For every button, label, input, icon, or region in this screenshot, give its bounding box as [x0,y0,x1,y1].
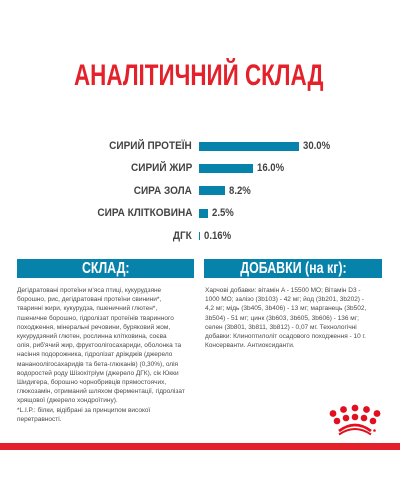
text: склад: Дегідратовані протеїни м'яса птиці, кукурудзяне [17,287,161,294]
text: добавки: Харчові добавки: вітамін A - 15500 МО; Вітамін D3 - [205,287,361,294]
text: склад: *L.I.P.: білки, відібрані за принципом високої [17,407,150,414]
row: сира зола [134,185,251,197]
heading: склад: СКЛАД: [82,260,129,277]
text: склад: борошно, рис, дегідратовані протеїни свинини*, [17,296,161,303]
text: склад: мананоолігосахаридів та бета-глюканів) (0,30%), олія [17,361,178,368]
text: склад: олія, риб'ячий жир, фруктоолігосахариди, оболонка та [17,342,181,349]
heading: добавки: ДОБАВКИ (на кг): [240,260,346,277]
text: добавки: селен (3b801, 3b811, 3b812) - 0,07 мг. Технологічні [205,324,357,331]
bar chart [97,139,330,242]
icon: royal canin crown logo [330,404,380,436]
row: дгк: 0.16% [204,230,231,242]
bottom red stripe [0,443,400,450]
row: сирий жир: СИРИЙ ЖИР [131,162,192,174]
text: склад: насіння подорожника, гідролізат дріжджів (джерело [17,351,172,358]
heading: склад [17,259,194,278]
row: сира клітковина: СИРА КЛІТКОВИНА [97,207,192,219]
row: сира зола: 8.2% [229,185,251,197]
text: склад: кукурудзяний глютен, рослинна клітковина, соєва [17,333,167,340]
text: добавки: добавки: Клиноптилоліт осадового походження - 10 г. [205,333,366,340]
text: склад: Шидигера, борошно чорнобривців прямостоячих, [17,379,166,386]
text: склад: походження, мінеральні речовини, буряковий жом, [17,324,170,331]
text: склад: перетравності. [17,416,62,423]
text: склад: пшеничне борошно, гідролізат протеїнів тваринного [17,315,174,322]
row: дгк [172,230,231,242]
text: добавки [205,287,366,349]
text: склад: глюкозамін, отриманий шляхом ферментації, гідролізат [17,388,185,395]
text: добавки: 4,2 мг; мідь (3b405, 3b406) - 13 мг; марганець (3b502, [205,305,366,312]
row: сирий протеїн: 30.0% [303,140,330,152]
text: склад: тваринні жири, кукурудза, пшеничний глютен*, [17,305,157,312]
row: сирий жир [131,161,284,174]
row: сирий жир: 16.0% [257,162,284,174]
heading: добавки [204,259,382,278]
row: сирий протеїн: СИРИЙ ПРОТЕЇН [109,140,192,152]
text: склад: хрящової (джерело хондроїтину). [17,397,118,404]
row: сира зола: СИРА ЗОЛА [134,185,192,197]
row: сира клітковина: 2.5% [212,207,234,219]
row: сирий протеїн [109,139,330,152]
title: АНАЛІТИЧНИЙ СКЛАД [74,59,324,92]
text: добавки: Консерванти. Антиоксиданти. [205,342,295,349]
row: сира клітковина [97,207,234,219]
text: добавки: 3b504) - 51 мг; цинк (3b603, 3b605, 3b606) - 136 мг; [205,315,359,322]
text: склад [17,287,185,423]
text: склад: водоростей роду Шізохітріум (джерело ДГК), сік Юкки [17,370,179,377]
row: дгк: ДГК [173,230,192,242]
text: добавки: 1000 МО; залізо (3b103) - 42 мг; йод (3b201, 3b202) - [205,296,364,303]
